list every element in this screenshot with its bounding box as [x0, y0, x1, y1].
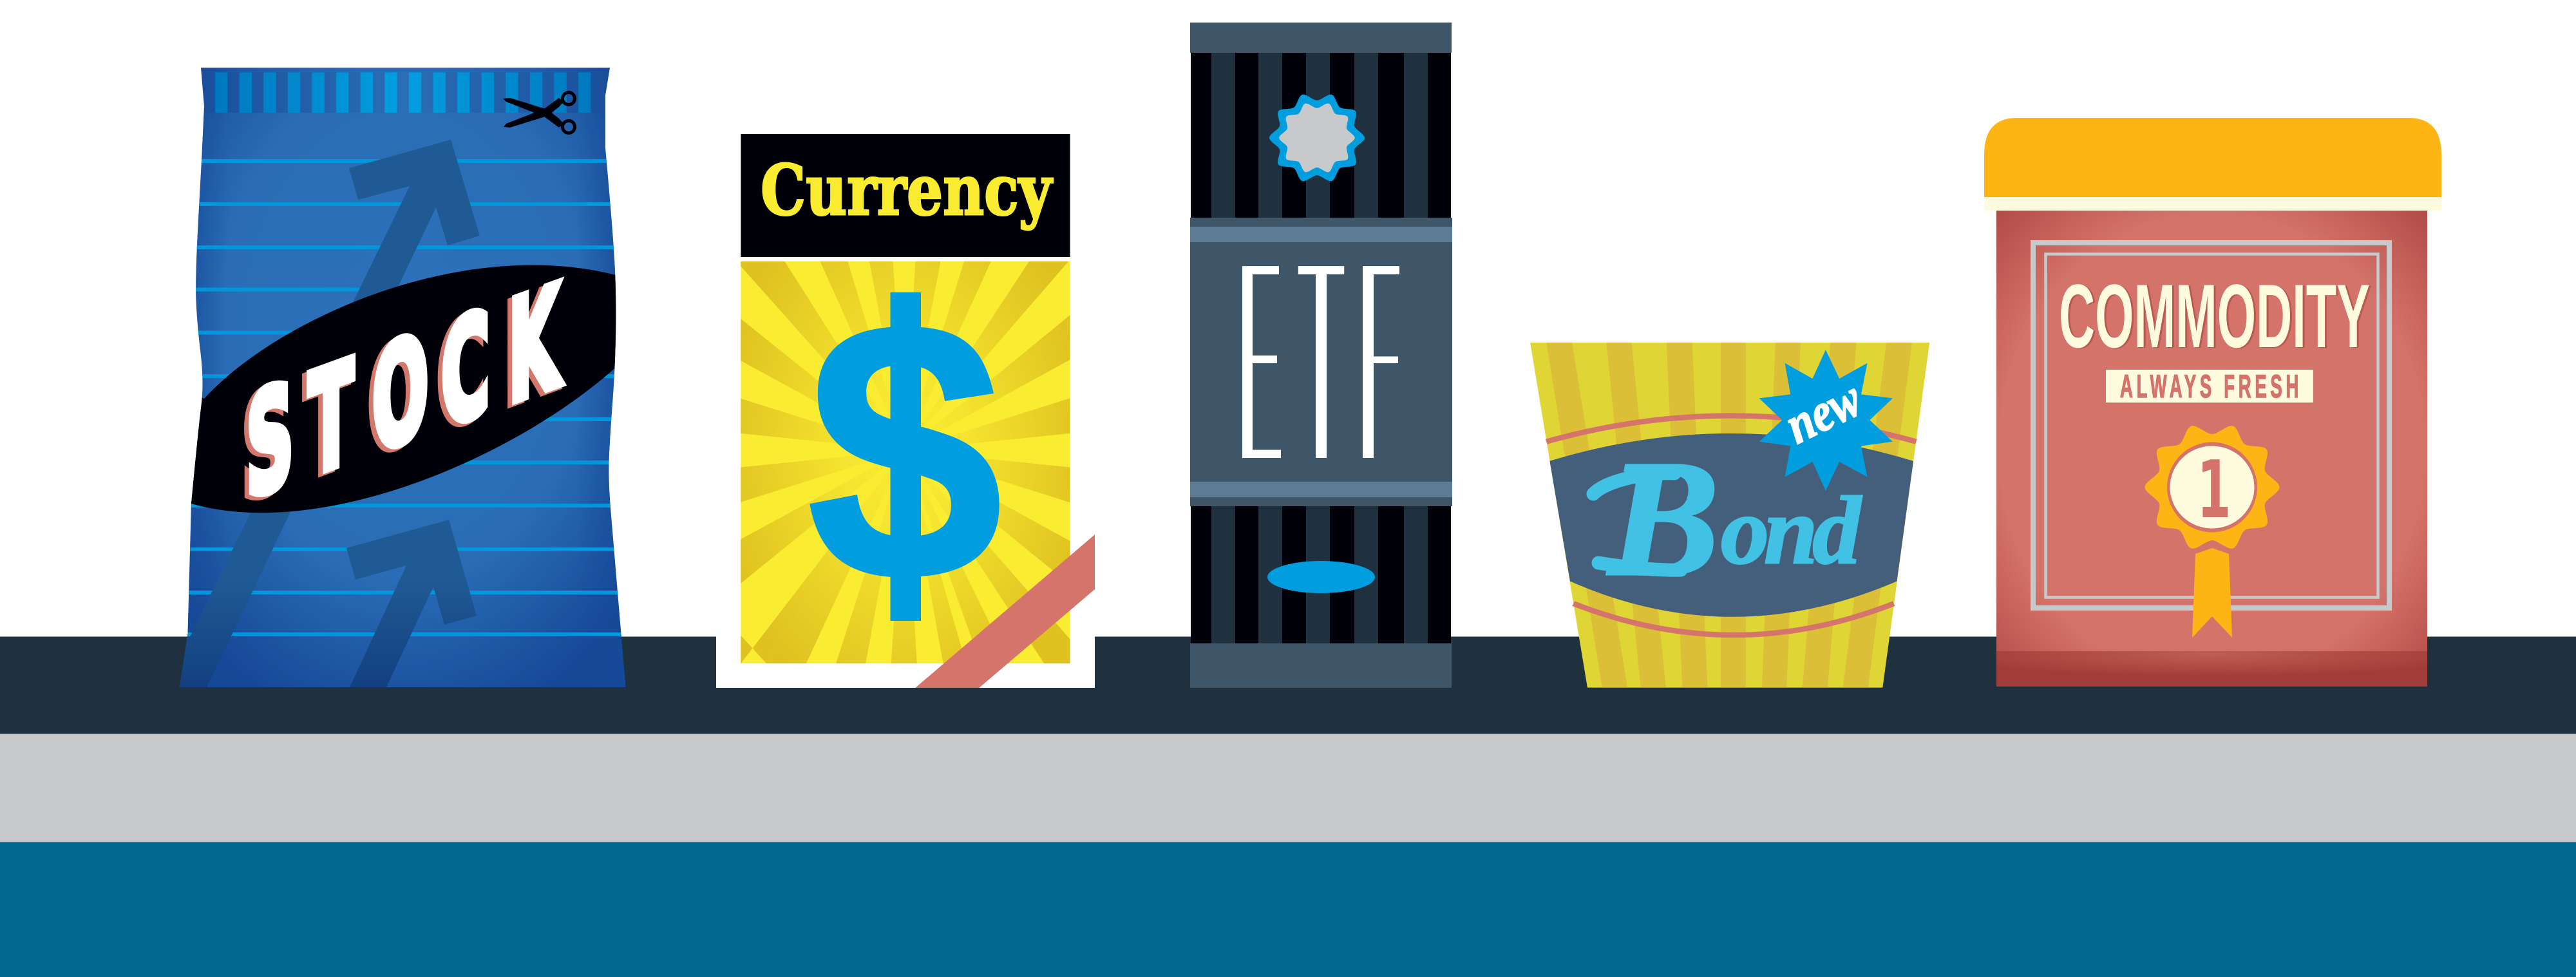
always fresh tag: ALWAYS FRESH: [2120, 368, 2302, 404]
currency heading: Currency: [761, 150, 1054, 231]
sunburst panel: [741, 261, 1070, 663]
medal: [2167, 442, 2257, 532]
new text: new: [1776, 368, 1871, 455]
currency header: [741, 134, 1070, 257]
package: commodity jar: [1984, 118, 2441, 687]
bottom cap: [1190, 643, 1452, 688]
lid: [1984, 118, 2441, 197]
shelf: [0, 636, 2576, 977]
package: stock bag: [174, 64, 631, 689]
rosette: [2145, 421, 2280, 553]
perforated top strip: [205, 72, 603, 113]
ETF heading: ETF: [1236, 206, 1405, 518]
jar base: [1996, 651, 2427, 687]
blue oval: [1267, 561, 1375, 593]
middle panel: [1190, 218, 1452, 506]
upper arrow: [174, 140, 480, 687]
Bond flourishes: [1593, 473, 1681, 570]
upper stripes: [1191, 53, 1451, 218]
horizontal stripes: [174, 159, 631, 636]
lower stripes: [1191, 506, 1451, 643]
STOCK text: STOCK: [242, 259, 557, 535]
badge: [1269, 91, 1365, 185]
lid rim: [1984, 197, 2441, 211]
black label: [174, 265, 618, 513]
dollar sign: $: [807, 244, 1003, 658]
package: ETF tin: [1190, 23, 1452, 688]
light bands: [1190, 227, 1452, 497]
frames: [2033, 243, 2389, 608]
tub body with stripes: [1530, 343, 1929, 688]
icon: scissors: [503, 93, 574, 133]
blue starburst: [1759, 350, 1893, 491]
STOCK text: STOCK: [246, 256, 562, 531]
ribbon award: [2145, 421, 2280, 638]
navy label: [1549, 433, 1913, 617]
commodity heading: [2059, 265, 2372, 367]
lower arrow: [346, 520, 477, 687]
top cap: [1190, 23, 1452, 53]
Bond heading: B: [1608, 426, 1719, 611]
package: bond tub: [1530, 343, 1929, 688]
bag body: [174, 64, 631, 689]
ribbon tail: [2192, 548, 2232, 638]
white card: [716, 515, 1095, 688]
red curves: [1546, 415, 1916, 635]
Bond heading: ond: [1721, 477, 1862, 584]
package: currency box: [716, 134, 1095, 688]
number one: 1: [2197, 444, 2231, 536]
jar body: [1996, 211, 2427, 687]
salmon diagonal strip: [915, 535, 1095, 688]
